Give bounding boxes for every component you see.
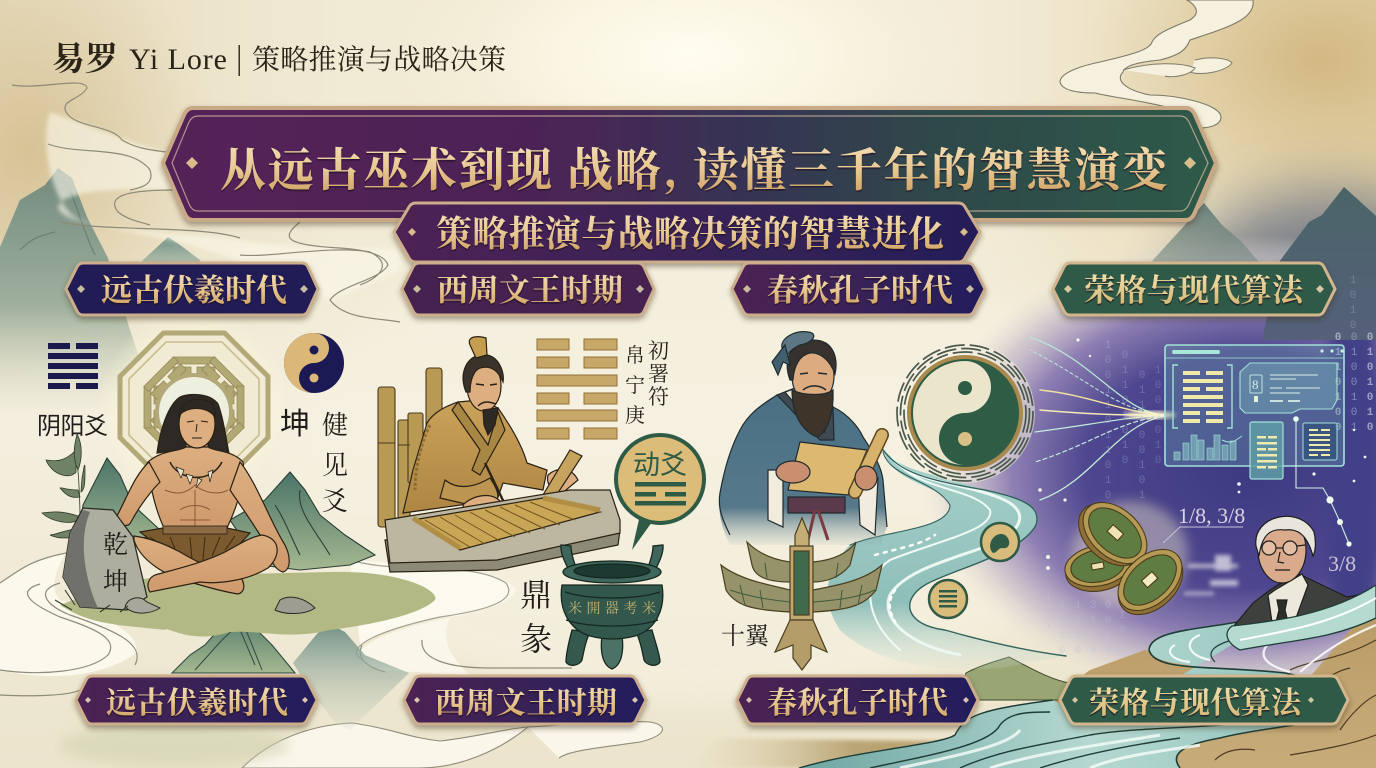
binary rain: 01101010 bbox=[1119, 350, 1131, 470]
rock with 乾坤: 乾 bbox=[103, 531, 128, 559]
era tag top: 西周文王时期 bbox=[402, 263, 654, 315]
binary rain bbox=[1042, 262, 1376, 660]
binary rain: 0110100 bbox=[1332, 332, 1344, 437]
era tag top: 远古伏羲时代 bbox=[66, 263, 318, 315]
seal text column left bbox=[625, 344, 645, 427]
rock with 乾坤: 坤 bbox=[103, 568, 128, 596]
icon: bronze ding bbox=[561, 545, 663, 669]
river foreground over Jung bbox=[1227, 585, 1376, 650]
era tag top: 荣格与现代算法: 荣格与现代算法 bbox=[1084, 265, 1306, 310]
speech bubble: 动爻: 动爻 bbox=[633, 443, 687, 482]
era tag top: 荣格与现代算法 bbox=[1053, 263, 1335, 315]
distant mountains right bbox=[1130, 187, 1376, 340]
label: 阴阳爻: 阴阳爻 bbox=[37, 406, 108, 441]
icon: large yin-yang with hexagram ring bbox=[895, 343, 1035, 483]
icon: yin-yang navy bbox=[284, 333, 344, 393]
era tag top: 西周文王时期: 西周文王时期 bbox=[437, 265, 623, 310]
main title banner bbox=[163, 108, 1216, 220]
background: cosmic purple glow bbox=[920, 190, 1376, 705]
binary rain: 1230 bbox=[1072, 600, 1084, 660]
lower right land bbox=[690, 600, 1376, 768]
holographic dashboard bbox=[1165, 345, 1352, 547]
holographic dashboard: 8 bbox=[1252, 377, 1258, 392]
era tag bottom: 西周文王时期 bbox=[404, 676, 646, 724]
title text: 从远古巫术到现 战略, 读懂三千年的智慧演变 bbox=[220, 134, 1169, 200]
era tag bottom: 远古伏羲时代: 远古伏羲时代 bbox=[106, 678, 288, 722]
label: 1/8, 3/8: 1/8, 3/8 bbox=[1178, 503, 1245, 528]
era tag bottom: 西周文王时期: 西周文王时期 bbox=[435, 678, 617, 722]
binary rain: 1010 bbox=[1347, 275, 1359, 335]
plant bbox=[42, 434, 85, 538]
icon: small circle medallions bbox=[929, 523, 1019, 618]
label: 鼎: 鼎 bbox=[520, 577, 552, 613]
icon: bronze coins bbox=[1062, 489, 1196, 627]
label: 3/8: 3/8 bbox=[1328, 551, 1356, 576]
mist swirls top left bbox=[12, 83, 400, 322]
label: 坤: 坤 bbox=[280, 399, 310, 443]
icon: gold hexagram bbox=[537, 339, 617, 439]
star specks bbox=[1038, 338, 1366, 570]
binary rain: 101 bbox=[1042, 590, 1054, 635]
binary rain: 0101010 bbox=[1364, 332, 1376, 437]
seal text column: 初署符: 符 bbox=[648, 385, 669, 409]
era tag top: 春秋孔子时代: 春秋孔子时代 bbox=[767, 265, 953, 310]
seal text column left: 庚 bbox=[625, 404, 645, 427]
seal script column: 爻 bbox=[322, 487, 348, 516]
figure: King Wen bbox=[403, 337, 582, 515]
icon: hexagram navy bbox=[48, 343, 98, 389]
era tag bottom: 春秋孔子时代 bbox=[737, 676, 978, 724]
seal text column left: 帛 bbox=[625, 344, 645, 367]
figure: Carl Jung bbox=[1233, 516, 1376, 627]
subtitle banner bbox=[394, 203, 980, 262]
bamboo slips left bbox=[378, 368, 442, 527]
seal text column left: 宁 bbox=[625, 374, 645, 397]
rock with 乾坤 bbox=[55, 508, 315, 614]
brand header: Yi Lore bbox=[129, 43, 227, 76]
subtitle text: 策略推演与战略决策的智慧进化 bbox=[436, 206, 944, 257]
binary rain: 100110110101 bbox=[1102, 340, 1114, 520]
binary rain: 0010 bbox=[1102, 600, 1114, 660]
seal script column: 见 bbox=[322, 451, 348, 480]
speech bubble: 动爻 bbox=[616, 435, 704, 550]
mist swirls lower left bbox=[0, 553, 662, 768]
small mountains behind Fuxi bbox=[80, 458, 375, 570]
label: 彖: 彖 bbox=[520, 621, 552, 657]
label: 1/8, 3/8 bbox=[1163, 503, 1245, 543]
binary rain: 0100 bbox=[1290, 262, 1302, 322]
seal text column: 初署符 bbox=[648, 339, 669, 409]
figure: Fuxi bbox=[116, 395, 289, 594]
blurred glyph glow bbox=[1184, 555, 1238, 595]
label: 十翼: 十翼 bbox=[721, 623, 770, 650]
brand header: 策略推演与战略决策 bbox=[252, 38, 506, 78]
binary rain: 3130 bbox=[1087, 600, 1099, 660]
river lower right bbox=[799, 587, 1376, 768]
icon: Ten Wings artifact bbox=[721, 518, 882, 670]
era tag bottom: 春秋孔子时代: 春秋孔子时代 bbox=[767, 678, 948, 722]
mountains lower left bbox=[172, 608, 409, 730]
stone table with bamboo scroll bbox=[385, 490, 620, 572]
binary rain: 011100101 bbox=[1136, 370, 1148, 505]
binary rain: 10 bbox=[1116, 610, 1128, 640]
flowing river centre bbox=[828, 448, 1066, 669]
icon: bagua octagon bbox=[98, 311, 290, 503]
ground bbox=[60, 572, 435, 636]
binary rain: 1001010 bbox=[1152, 365, 1164, 470]
seal script column bbox=[322, 411, 348, 516]
seal text column: 初署符: 署 bbox=[648, 362, 669, 386]
mist swirl top right bbox=[1060, 0, 1253, 128]
era tag top: 远古伏羲时代: 远古伏羲时代 bbox=[101, 265, 287, 310]
era tag bottom: 荣格与现代算法 bbox=[1060, 676, 1348, 724]
icon: bronze ding: 米開器考米 bbox=[568, 600, 656, 617]
binary rain: 0110 bbox=[1056, 600, 1068, 660]
figure: Confucius bbox=[719, 332, 887, 545]
brand header: 易罗 bbox=[52, 33, 118, 80]
brand header bbox=[52, 33, 506, 80]
era tag bottom: 荣格与现代算法: 荣格与现代算法 bbox=[1089, 678, 1304, 722]
light streams into screen bbox=[1030, 337, 1176, 500]
era tag bottom: 远古伏羲时代 bbox=[76, 676, 317, 724]
binary rain: 0100101 bbox=[1348, 332, 1360, 437]
seal text column: 初署符: 初 bbox=[648, 339, 669, 363]
seal script column: 健 bbox=[322, 411, 348, 440]
distant mountains left bbox=[0, 168, 215, 420]
era tag top: 春秋孔子时代 bbox=[732, 263, 985, 315]
